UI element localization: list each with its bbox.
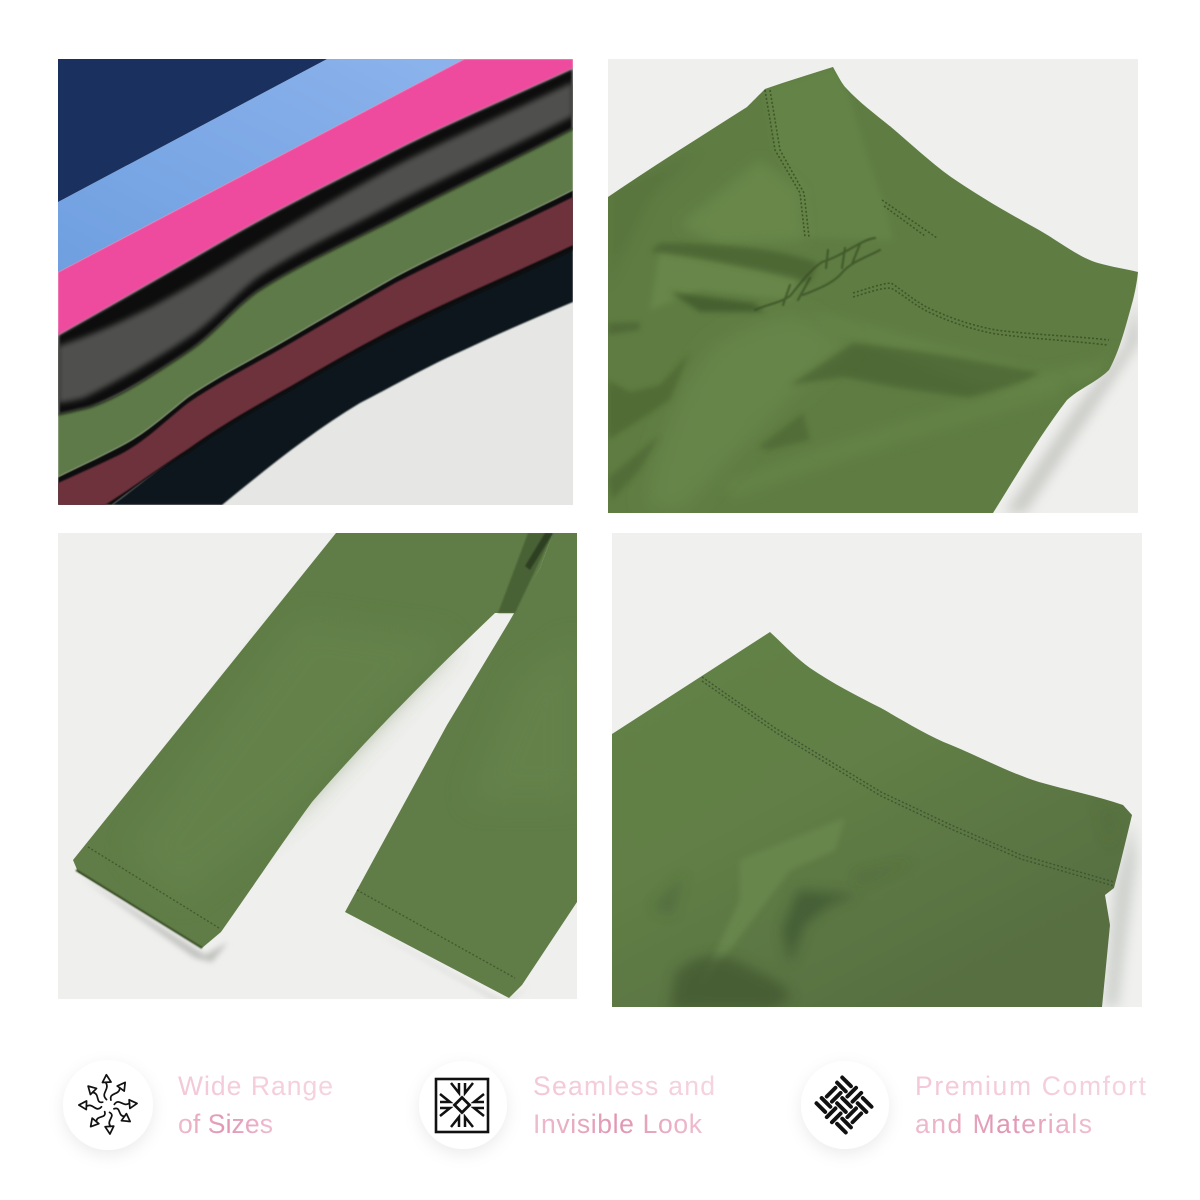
label: seamless and invisible look (533, 1071, 715, 1139)
label: wide range of sizes (178, 1071, 333, 1139)
stitching lines (765, 90, 1109, 345)
fabric: maroon face (58, 197, 573, 505)
ridge highlights (808, 310, 1115, 395)
fabric shading clipped to garment (660, 823, 848, 1007)
fabric: light blue layer (58, 59, 464, 272)
garment body (608, 59, 1138, 513)
fabric: maroon layer (58, 190, 573, 505)
panel: high waistband (612, 533, 1142, 1010)
dark folds (608, 243, 818, 500)
icon: geometric square (436, 1079, 488, 1132)
garment shadow (1005, 300, 1140, 513)
fabric: grey layer shadow (58, 68, 573, 415)
fold shading clipped to garment (608, 67, 1034, 496)
waistband stitching (702, 677, 1114, 886)
light area on legs (288, 648, 459, 836)
panel: legging cuffs (58, 533, 577, 1005)
fabric highlight (716, 823, 840, 958)
garment shadow (1104, 820, 1137, 1007)
fabric: green layer (58, 127, 573, 477)
icon badge: sizes (63, 1060, 153, 1150)
fabric: navy layer (58, 59, 327, 202)
left leg (73, 533, 553, 948)
waist flap (764, 67, 849, 91)
fabric: grey layer (58, 82, 573, 403)
fabric: black layer (112, 245, 573, 505)
feature: seamless look (419, 1061, 715, 1149)
label: wide range of sizes: of Sizes (178, 1109, 273, 1139)
panel: ruched back detail (608, 59, 1140, 513)
fabric folds (660, 888, 848, 1007)
feature: premium comfort (801, 1061, 1147, 1149)
panel: stacked fabric colours (58, 59, 573, 505)
label: seamless and invisible look: Invisible Look (533, 1109, 703, 1139)
right leg (345, 533, 577, 998)
garment body (612, 632, 1132, 1007)
label: premium comfort and materials: and Materials (915, 1109, 1092, 1139)
label: wide range of sizes: Wide Range (178, 1071, 333, 1101)
icon: woven fabric (815, 1076, 873, 1134)
label: premium comfort and materials: Premium Comfort (915, 1071, 1147, 1101)
leg shadows (96, 887, 500, 999)
label: seamless and invisible look: Seamless and (533, 1071, 715, 1101)
icon badge: materials (801, 1061, 889, 1149)
gathered ruching (755, 238, 880, 310)
stitching hems (88, 847, 515, 978)
fabric: pink layer (58, 59, 573, 335)
label: premium comfort and materials (915, 1071, 1147, 1139)
icon badge: seamless (419, 1061, 507, 1149)
icon: radiating arrows (79, 1074, 137, 1134)
dark crotch seam (498, 533, 553, 613)
feature: wide range of sizes (63, 1060, 333, 1150)
